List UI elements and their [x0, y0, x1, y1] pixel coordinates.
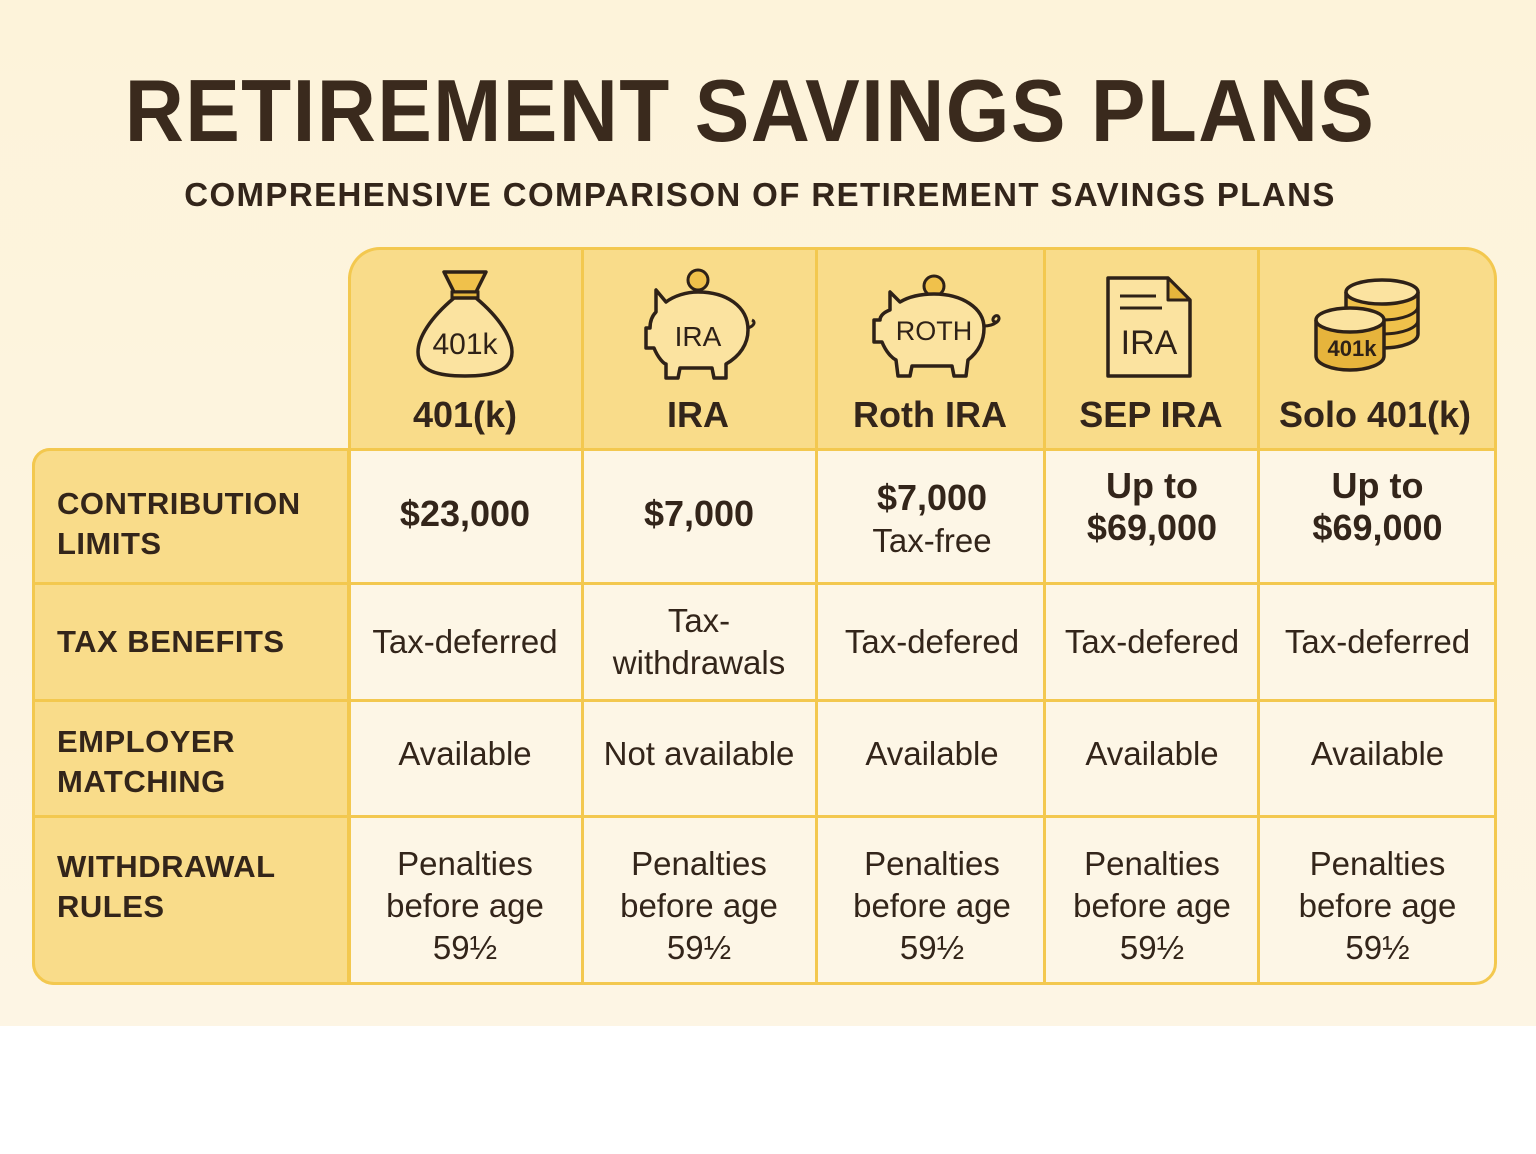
row: contribution values: Up to	[1332, 464, 1423, 506]
row: withdrawal rules values: before age	[620, 887, 778, 924]
header row background	[348, 247, 1497, 450]
row label: withdrawal rules: RULES	[57, 888, 165, 924]
icon: piggy bank IRA	[644, 268, 756, 380]
icon: money bag 401k	[416, 270, 514, 378]
row: withdrawal rules values: Penalties	[864, 845, 1000, 882]
row: employer matching values: Available	[1311, 734, 1444, 772]
row: employer matching values: Available	[398, 734, 532, 772]
icon: coin stacks 401k	[1314, 278, 1420, 372]
row: employer matching values	[398, 734, 1444, 772]
header: 401(k): 401(k)	[413, 394, 517, 435]
row: tax benefits values: Tax-	[668, 602, 730, 638]
row: employer matching values: Not available	[604, 734, 794, 772]
row: withdrawal rules values	[386, 845, 1456, 966]
row: withdrawal rules values: 59½	[433, 929, 497, 966]
row: tax benefits values: Tax-deferred	[1285, 622, 1470, 660]
icon: piggy bank ROTH: ROTH	[896, 316, 972, 346]
row label: employer matching	[57, 724, 235, 798]
row: withdrawal rules values: Penalties	[631, 845, 767, 882]
row: employer matching values: Available	[865, 734, 999, 772]
row label: contribution limits	[57, 486, 301, 560]
row: withdrawal rules values: Penalties	[1084, 845, 1220, 882]
header: Roth IRA: Roth IRA	[853, 394, 1007, 435]
icon: document IRA	[1106, 276, 1192, 378]
row: withdrawal rules values: before age	[853, 887, 1011, 924]
row: withdrawal rules values: 59½	[667, 929, 731, 966]
row label: contribution limits: LIMITS	[57, 526, 162, 560]
row: contribution values: $7,000	[877, 477, 987, 518]
row: withdrawal rules values: before age	[1299, 887, 1456, 924]
icon: piggy bank IRA: IRA	[675, 321, 722, 352]
row: contribution values: $69,000	[1087, 506, 1217, 548]
row label: employer matching: MATCHING	[57, 764, 226, 798]
row label: withdrawal rules	[57, 848, 276, 924]
row: contribution values: $23,000	[400, 492, 530, 534]
row: withdrawal rules values: 59½	[900, 929, 964, 966]
table	[32, 247, 1497, 985]
header: Solo 401(k): Solo 401(k)	[1279, 394, 1471, 435]
body background	[32, 448, 1497, 985]
subtitle: COMPREHENSIVE COMPARISON OF RETIREMENT SAVINGS PLANS	[184, 176, 1336, 213]
label column	[32, 448, 350, 985]
row: withdrawal rules values: Penalties	[397, 845, 533, 882]
header: SEP IRA: SEP IRA	[1079, 394, 1223, 435]
row label: tax benefits: TAX BENEFITS	[57, 624, 285, 658]
icon: document IRA: IRA	[1121, 324, 1178, 362]
row: withdrawal rules values: Penalties	[1310, 845, 1445, 882]
row: contribution values: Tax-free	[872, 522, 992, 559]
row: tax benefits values: Tax-defered	[845, 622, 1019, 660]
row: withdrawal rules values: before age	[386, 887, 544, 924]
row: employer matching values: Available	[1085, 734, 1219, 772]
row: contribution values: Up to	[1106, 464, 1198, 506]
row: contribution values	[400, 464, 1443, 559]
row label: employer matching: EMPLOYER	[57, 724, 235, 758]
row: tax benefits values	[372, 602, 1470, 680]
icon: coin stacks 401k: 401k	[1328, 336, 1377, 361]
row: withdrawal rules values: 59½	[1345, 929, 1410, 966]
row: contribution values: $69,000	[1312, 506, 1443, 548]
row: tax benefits values: Tax-deferred	[372, 622, 558, 660]
header: IRA: IRA	[667, 394, 729, 435]
row: withdrawal rules values: before age	[1073, 887, 1231, 924]
icon: piggy bank ROTH	[872, 274, 1001, 378]
title: RETIREMENT SAVINGS PLANS	[125, 61, 1375, 160]
row label: contribution limits: CONTRIBUTION	[57, 486, 301, 520]
row: withdrawal rules values: 59½	[1120, 929, 1184, 966]
row: tax benefits values: withdrawals	[613, 644, 785, 680]
row: contribution values: $7,000	[644, 492, 754, 534]
row label: withdrawal rules: WITHDRAWAL	[57, 848, 276, 884]
icon: money bag 401k: 401k	[432, 328, 499, 361]
row: tax benefits values: Tax-defered	[1065, 622, 1239, 660]
